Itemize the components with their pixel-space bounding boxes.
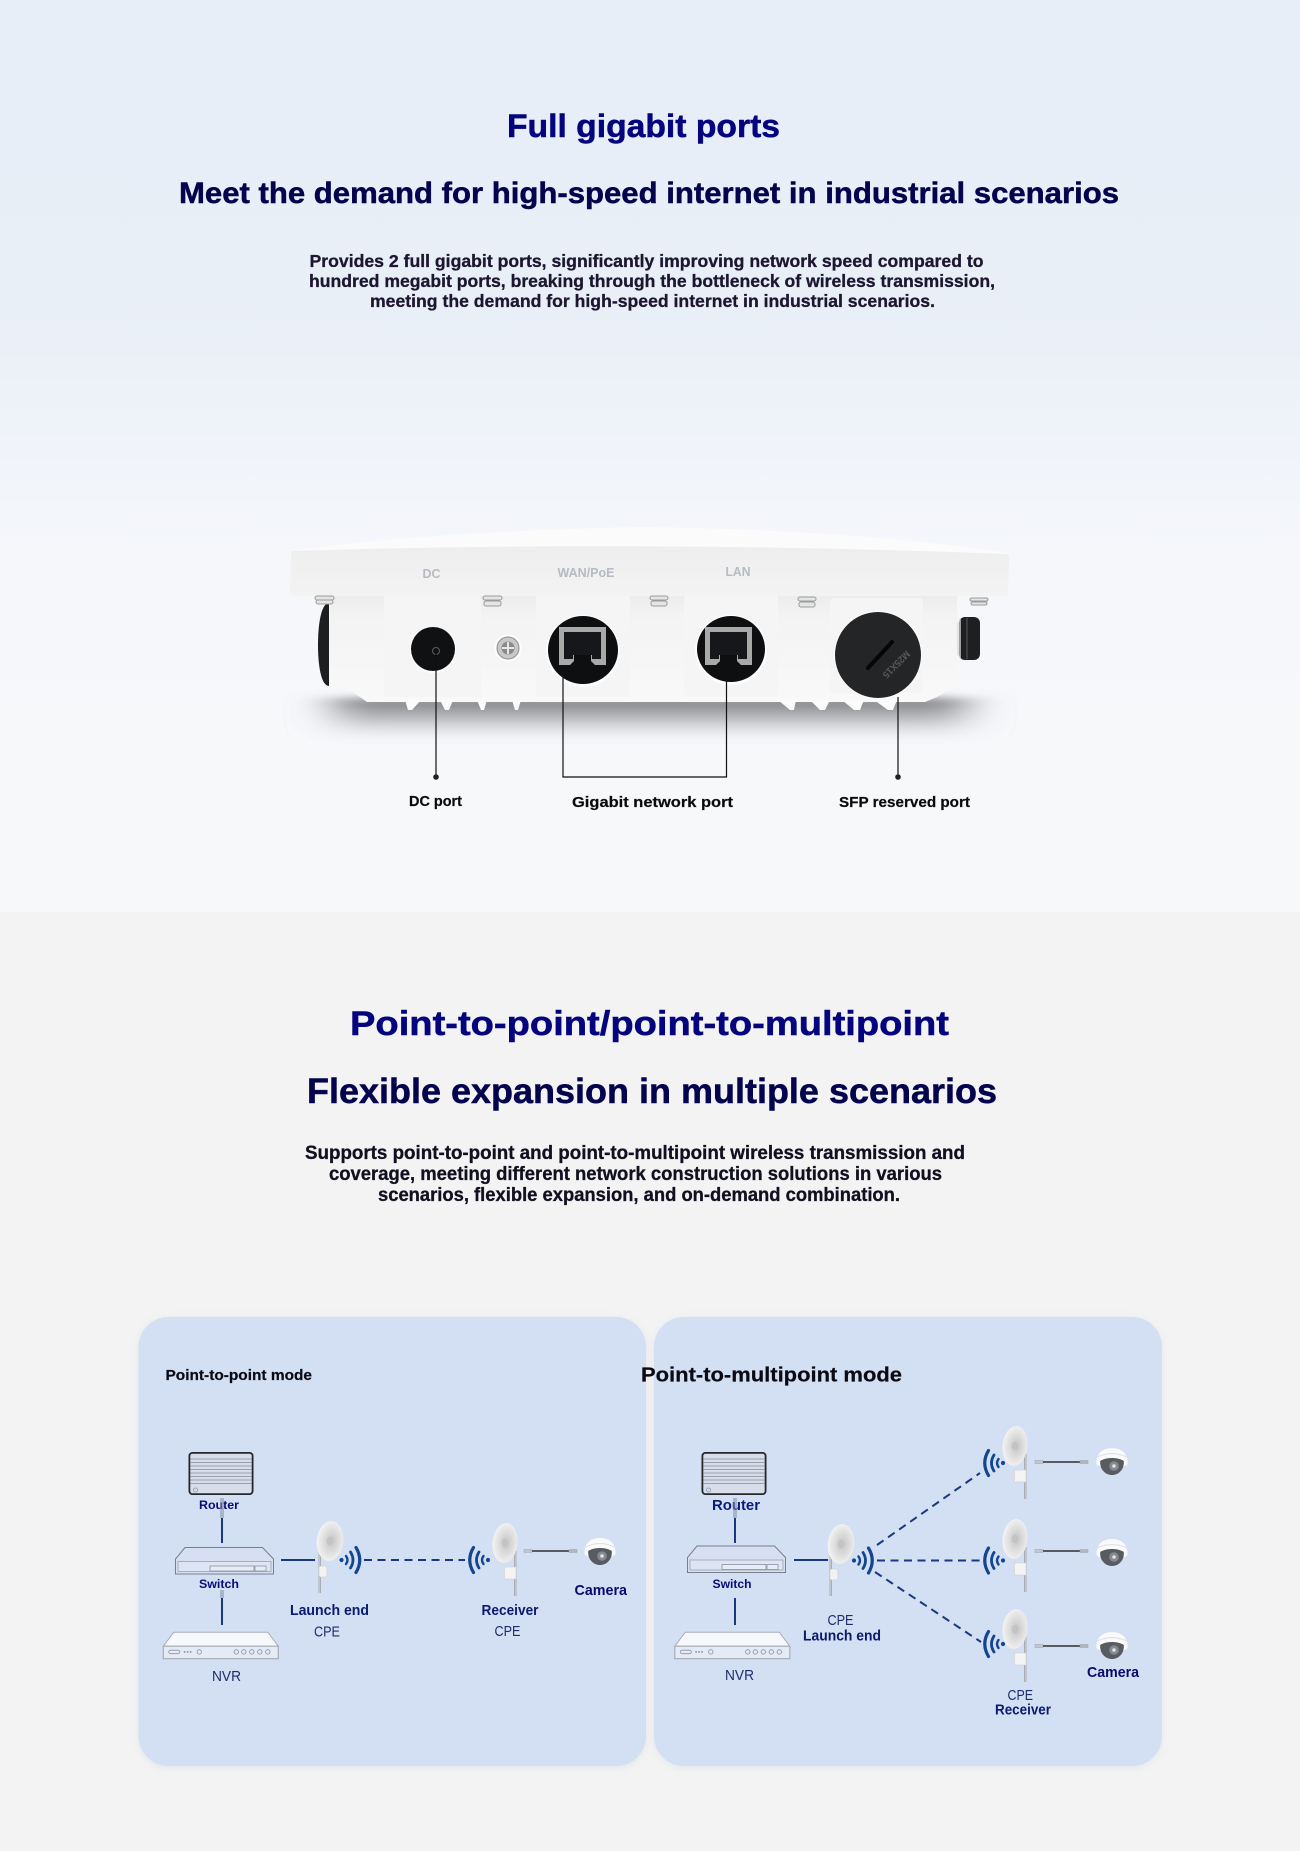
icon: receiver CPE dish (490, 1522, 520, 1596)
device body (330, 595, 957, 702)
DC port (410, 627, 456, 673)
fins (405, 700, 897, 710)
label: switch: Switch (712, 1577, 752, 1591)
icon: launch CPE dish (315, 1520, 345, 1593)
label: camera: Camera (1087, 1664, 1140, 1681)
label: receiver: Receiver (482, 1602, 539, 1619)
title: Full gigabit ports: Full gigabit ports (507, 108, 780, 144)
panel: point-to-point mode (138, 1317, 646, 1766)
right cable gland (957, 617, 980, 660)
icon: launch CPE dish (826, 1523, 856, 1596)
text block: gigabit description (309, 251, 995, 311)
callout label: DC port: DC port (409, 794, 462, 810)
port labels on shell: DC (422, 566, 441, 581)
SFP cap (834, 611, 922, 699)
SFP cap: M25X15 (880, 648, 912, 680)
icon: wireless signal out (852, 1548, 872, 1573)
icon: router (189, 1453, 253, 1494)
receiver group: middle (985, 1518, 1128, 1592)
WAN RJ45 port (546, 615, 620, 687)
top shell dome (291, 527, 1008, 562)
subtitle: Flexible expansion: Flexible expansion in multiple scenarios (307, 1072, 997, 1111)
connector: switch to NVR (734, 1598, 736, 1625)
subtitle: industrial scenarios: Meet the demand for high-speed internet in industrial scenarios (179, 177, 1119, 210)
connector: switch to launch CPE (794, 1559, 828, 1561)
icon: NVR (163, 1632, 278, 1659)
text block: gigabit description: hundred megabit ports, breaking through the bottleneck of wireless transmission, (309, 271, 995, 291)
panel: point-to-multipoint mode (641, 1317, 1162, 1766)
top shell band (290, 546, 1009, 596)
ground screw (494, 634, 522, 662)
text block: gigabit description: meeting the demand for high-speed internet in industrial scenarios. (370, 291, 935, 311)
connector: router to switch (220, 1498, 224, 1543)
port labels on shell: WAN/PoE (558, 565, 615, 580)
heading: point-to-point mode: Point-to-point mode (166, 1368, 312, 1384)
title: Point-to-point/point-to-multipoint: Point-to-point/point-to-multipoint (350, 1005, 949, 1043)
text block: gigabit description: Provides 2 full gigabit ports, significantly improving network speed compared to (310, 251, 984, 271)
LAN RJ45 port (695, 615, 767, 685)
text block: modes description: scenarios, flexible expansion, and on-demand combination. (378, 1185, 900, 1206)
callout label: Gigabit network port: Gigabit network port (572, 795, 733, 811)
label: NVR: NVR (212, 1669, 241, 1685)
label: router: Router (199, 1498, 239, 1512)
icon: cable (524, 1550, 577, 1552)
label: CPE left: CPE (314, 1624, 340, 1640)
recessed port panels (384, 595, 923, 697)
callout label: SFP reserved port: SFP reserved port (839, 795, 970, 811)
icon: switch (688, 1546, 786, 1572)
background: top section (0, 0, 1300, 912)
receiver group: bottom (985, 1608, 1128, 1682)
text block: modes description: coverage, meeting different network construction solutions in various (329, 1164, 942, 1185)
device shadow (335, 698, 965, 742)
connector: router to switch (733, 1498, 737, 1543)
dashed wireless links (875, 1473, 981, 1642)
connector: switch to launch CPE (281, 1559, 315, 1561)
label: receiver: Receiver (995, 1702, 1051, 1718)
device: outdoor CPE with ports (290, 527, 1009, 742)
heading: point-to-multipoint mode: Point-to-multipoint mode (641, 1364, 902, 1386)
icon: switch (176, 1548, 274, 1574)
connector: switch to NVR (220, 1590, 224, 1625)
label: CPE launch: CPE (828, 1613, 854, 1629)
text block: modes description: Supports point-to-point and point-to-multipoint wireless transmission and (305, 1143, 965, 1164)
icon: wireless signal out (339, 1548, 360, 1572)
label: CPE right: CPE (494, 1624, 521, 1640)
icon: router (702, 1453, 766, 1494)
label: launch end: Launch end (290, 1602, 369, 1619)
left black strip (318, 603, 329, 686)
icon: camera (584, 1538, 616, 1565)
port labels on shell (422, 564, 750, 581)
port labels on shell: LAN (726, 564, 750, 579)
label: NVR: NVR (725, 1668, 754, 1684)
dashed wireless link (364, 1559, 465, 1561)
screw clips (315, 596, 988, 607)
icon: NVR (675, 1632, 790, 1659)
label: CPE receiver: CPE (1008, 1688, 1033, 1704)
label: camera: Camera (574, 1582, 628, 1599)
receiver group: top (985, 1425, 1128, 1499)
label: launch end: Launch end (803, 1628, 881, 1644)
label: switch: Switch (199, 1577, 239, 1591)
icon: wireless signal in (470, 1548, 490, 1572)
background: bottom section (0, 912, 1300, 1851)
text block: modes description (305, 1143, 965, 1206)
callout lines and dots (433, 653, 901, 780)
label: router: Router (712, 1497, 760, 1514)
